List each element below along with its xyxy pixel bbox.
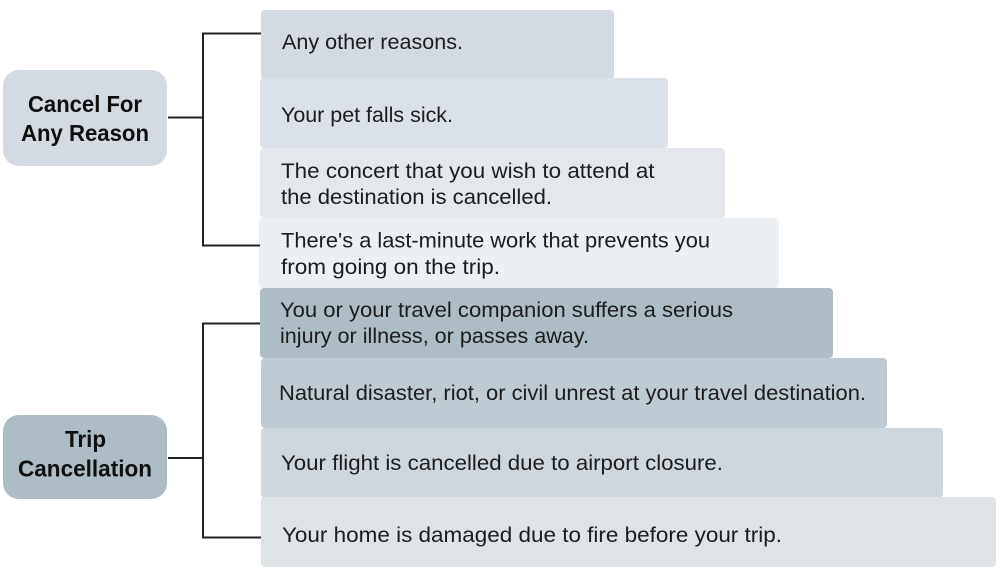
reason: any other reasons [261,10,614,80]
heading: Cancel For Any Reason [3,70,167,166]
reason: serious injury or illness: You or your travel companion suffers a serious [280,299,733,322]
reason: any other reasons: Any other reasons. [282,31,463,54]
heading: Cancel For Any Reason: Cancel For [28,91,142,117]
reason: concert cancelled: the destination is cancelled. [281,186,552,209]
connector: trip cancellation bracket [168,324,261,538]
reason: last-minute work: There's a last-minute work that prevents you [281,230,710,252]
reason: natural disaster: Natural disaster, riot, or civil unrest at your travel destination. [279,382,866,405]
reason: pet falls sick: Your pet falls sick. [281,104,453,127]
reason: home damaged: Your home is damaged due to fire before your trip. [282,524,782,547]
reason: flight cancelled: Your flight is cancelled due to airport closure. [281,452,723,475]
heading: Trip Cancellation: Cancellation [18,456,152,482]
reason: concert cancelled: The concert that you wish to attend at [281,160,655,183]
reason: pet falls sick [260,78,668,148]
heading: Cancel For Any Reason: Any Reason [21,120,149,146]
connector: cancel for any reason bracket [168,34,261,246]
reason: home damaged [261,497,996,567]
reason: natural disaster [261,358,887,428]
reason: last-minute work [259,218,779,288]
reason: serious injury or illness: injury or illness, or passes away. [280,325,589,348]
reason: last-minute work: from going on the trip. [281,256,500,279]
heading: Trip Cancellation [3,415,167,499]
heading: Trip Cancellation: Trip [65,426,106,452]
reason: serious injury or illness [260,288,833,358]
reason: flight cancelled [261,428,943,498]
reason: concert cancelled [260,148,725,218]
